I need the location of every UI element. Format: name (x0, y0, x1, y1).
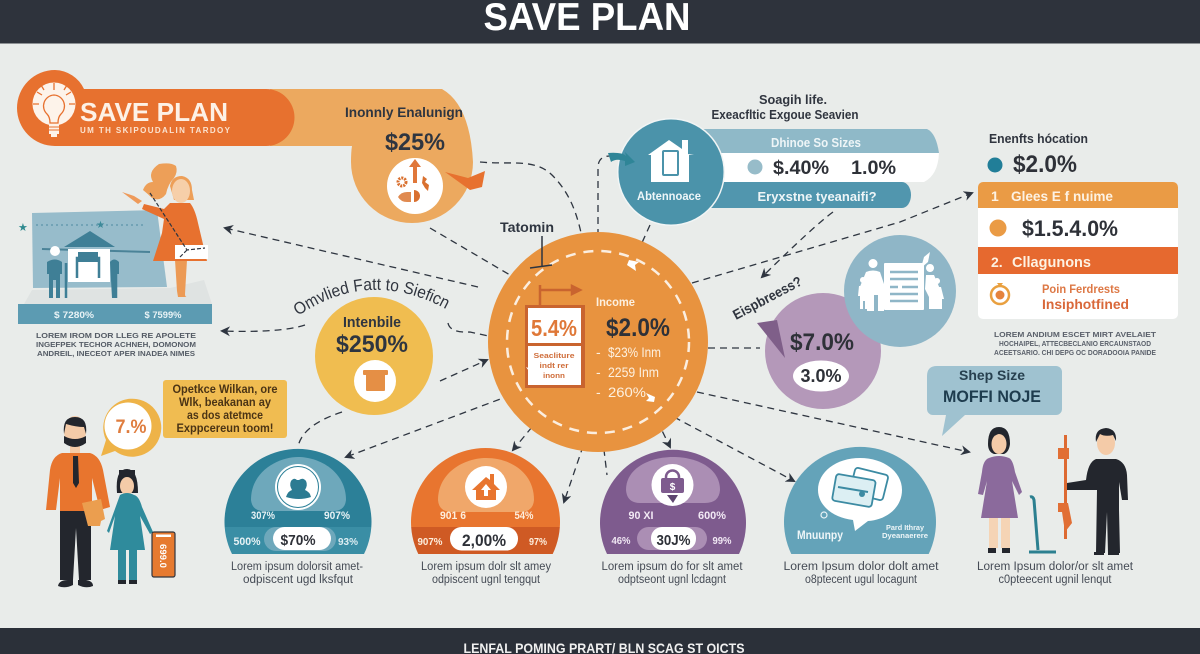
pill value: 2,00% (462, 531, 506, 550)
man figure (1067, 428, 1128, 555)
lighter pill (264, 527, 336, 551)
yellow callout: Wlk, beakanan ay (179, 397, 272, 409)
woman figure (122, 163, 208, 297)
circle label: Abtennoace (637, 191, 701, 203)
row one dot (990, 220, 1006, 236)
band heading: Dhinoe So Sizes (771, 136, 861, 150)
dome (224, 448, 372, 554)
phone (152, 532, 175, 577)
yellow callout (163, 380, 287, 438)
caption: Lorem Ipsum dolor dolt amet (784, 561, 939, 573)
vacuum stick (1029, 497, 1056, 552)
row two label: Cllagunons (1012, 254, 1091, 271)
value: $250% (336, 331, 408, 358)
value right: 1.0% (851, 158, 896, 179)
band text: Eryxstne tyeanaifi? (758, 189, 877, 204)
value left: $.40% (773, 158, 829, 179)
yellow callout: Exppcereun toom! (176, 423, 274, 435)
percent bubble: 7.% (116, 417, 147, 438)
arrow: centre to purple circle (708, 347, 760, 349)
teal pointer (608, 152, 635, 166)
house diagram (42, 231, 150, 298)
yellow callout: as dos atetmce (187, 410, 263, 422)
woman figure (978, 427, 1022, 553)
caption (231, 561, 363, 586)
speech bubble (818, 458, 902, 531)
callout label: Tatomin (500, 219, 554, 235)
panel: couple (977, 427, 1134, 586)
bubble heading: Shep Size (959, 367, 1025, 383)
inner dome (626, 457, 720, 503)
circle fill (618, 120, 724, 224)
income list: $23% Inm (608, 344, 661, 360)
metric top left: 307% (251, 510, 275, 522)
arrow: house to centre (636, 225, 650, 256)
dome (600, 450, 746, 554)
panel: woman at board (18, 163, 212, 358)
phone: 699.0 (158, 544, 168, 568)
metric bottom right: 97% (529, 536, 548, 548)
dome (784, 447, 936, 554)
inner dome (438, 458, 534, 512)
pointer arrow (445, 171, 485, 190)
curved label: Omvlied Fatt to Sieficn (294, 278, 448, 314)
dome side text: Dyeanaerere (882, 531, 928, 540)
metric top left: 901 6 (440, 510, 466, 522)
income list: - (596, 364, 601, 380)
arrow: centre to card dome (674, 417, 794, 481)
income list (596, 344, 661, 400)
arrow: yellow circle to teal dome (298, 412, 342, 447)
caption (977, 561, 1134, 586)
orange pole (1058, 435, 1072, 539)
arrow: centre to orange dome right (564, 423, 591, 502)
upper sign panel (528, 308, 581, 343)
blue circle (844, 235, 956, 347)
caption (784, 561, 939, 586)
income list: 260% (608, 384, 646, 400)
orange banner (17, 70, 294, 146)
header bar (0, 0, 1200, 44)
icon: lock: $ (670, 482, 676, 493)
icon: people (275, 464, 321, 510)
icon: house (465, 466, 507, 508)
icon: lock (652, 464, 694, 506)
sign text (534, 351, 574, 380)
bubble value: $25% (385, 129, 445, 156)
arrow: centre to orange dome (513, 427, 532, 450)
income value: $2.0% (606, 314, 670, 342)
caption: Lorem ipsum dolorsit amet- (231, 561, 363, 573)
inner dome (251, 457, 346, 511)
arrow: curved savings pointer to centre (480, 162, 586, 258)
lower pill band (700, 182, 911, 208)
white card (978, 182, 1178, 319)
heading: Enenfts hócation (989, 131, 1088, 146)
arrow: savings bubble to centre (430, 228, 510, 275)
panel: central income circle (488, 219, 708, 452)
arrow: label to centre (448, 323, 493, 337)
caption: INGEFPEK TECHOR ACHNEH, DOMONOM (36, 340, 196, 349)
dotted line (36, 224, 146, 226)
subtitle line one: Soagih life. (759, 92, 827, 107)
man figure (46, 416, 110, 587)
icon: light bulb (32, 82, 76, 137)
caption: c0pteecent ugnil lenqut (998, 574, 1112, 586)
panel: teal dome (224, 448, 372, 586)
metric bottom right: 93% (338, 536, 359, 548)
value band (18, 304, 212, 324)
row one value: $1.5.4.0% (1022, 216, 1118, 241)
pill value: $70% (280, 532, 316, 549)
metric bottom left: 500% (234, 536, 261, 548)
speech bubble: shop size (927, 366, 1062, 436)
lighter pill (637, 527, 707, 550)
light orange bar and bubble (270, 89, 473, 223)
metric top right: 54% (514, 510, 534, 522)
star marker: ★ (96, 220, 105, 231)
exclamation pointer (757, 320, 785, 358)
small ring (821, 512, 827, 518)
banner subtitle: UM TH SKIPOUDALIN TARDOY (80, 126, 231, 135)
metric bottom left: 46% (612, 535, 631, 547)
arrow: centre to purple dome (652, 410, 670, 447)
caption (421, 561, 551, 586)
percent bubble (101, 399, 161, 457)
metric bottom right: 99% (712, 535, 732, 547)
lower sign panel (528, 346, 581, 385)
metric bottom left: 907% (418, 536, 443, 548)
panel: housing pill (608, 92, 939, 226)
circle (488, 232, 708, 452)
white pill (273, 527, 331, 550)
arrow: centre down (601, 425, 607, 475)
arrow: overlap to board caption (222, 325, 305, 331)
row two text line one: Poin Ferdrests (1042, 282, 1120, 296)
caption: ANDREIL, INECEOT APER INADEA NIMES (37, 349, 195, 358)
sign text: Seacliture (534, 351, 574, 360)
rotated label: Eispbreess? (730, 273, 805, 323)
sign board (525, 305, 585, 388)
callout stem (530, 236, 552, 268)
icon: box (354, 360, 396, 402)
panel: purple dome (600, 450, 746, 586)
caption: odptseont ugnl lcdagnt (618, 574, 727, 586)
arrow: yellow circle to centre (440, 360, 487, 381)
caption (36, 331, 196, 358)
ring arrowhead left (526, 367, 535, 376)
arrow: branch to question (762, 212, 833, 277)
arrow: centre to couple (697, 392, 969, 452)
bubble label: Inonnly Enalunign (345, 104, 463, 120)
panel: yellow circle (294, 278, 448, 415)
dome side text: Pard Ithray (886, 523, 925, 532)
band value right: $ 7599% (144, 310, 182, 321)
sub value: 3.0% (800, 366, 842, 386)
row one header (978, 182, 1178, 208)
circle (315, 297, 433, 415)
icon: stopwatch (991, 283, 1009, 304)
caption: Lorem ipsum dolr slt amey (421, 561, 551, 573)
row two number: 2. (991, 254, 1003, 270)
white pill (651, 527, 696, 550)
income label: Income (596, 295, 635, 309)
white ellipse (793, 360, 849, 392)
sign text: indt rer (540, 361, 569, 370)
table caption: LOREM ANDIUM ESCET MIRT AVELAIET (994, 330, 1156, 339)
panel: orange dome (411, 448, 560, 586)
yellow callout: Opetkce Wilkan, ore (172, 384, 278, 396)
white pill (450, 527, 518, 550)
panel: purple and blue circles (730, 235, 956, 409)
footer bar (0, 628, 1200, 654)
circle (617, 118, 725, 226)
sign text: inonn (543, 371, 565, 380)
caption: Lorem Ipsum dolor/or slt amet (977, 561, 1134, 573)
banner title: SAVE PLAN (80, 97, 228, 127)
metric top right: 600% (698, 510, 726, 522)
metric top right: 907% (324, 510, 350, 522)
panel: savings banner (17, 70, 485, 223)
pill value: 30J% (656, 532, 690, 549)
caption: odpiscent ugnl tengqut (432, 574, 541, 586)
row one number: 1 (991, 188, 999, 204)
arrow: centre to right panel (692, 193, 972, 283)
caption: o8ptecent ugul locagunt (805, 574, 918, 586)
child figure (107, 469, 153, 584)
caption: Lorem ipsum do for slt amet (602, 561, 743, 573)
sign arrow (540, 285, 580, 306)
dome (411, 448, 560, 554)
caption: LOREM IROM DOR LLEG RE APOLETE (36, 331, 196, 340)
purple circle (765, 293, 881, 409)
row one label: Glees E f nuime (1011, 188, 1113, 204)
table caption: ACEETSARIO. CHI DEPG OC DORADOOIA PANIDE (994, 348, 1156, 357)
panel: card dome (784, 447, 939, 586)
icon: house (648, 140, 694, 182)
row two header (978, 247, 1178, 274)
top pill band (700, 129, 939, 153)
table caption (994, 330, 1156, 357)
board (32, 210, 167, 288)
value: $7.0% (790, 329, 854, 356)
icon: growth gears (387, 158, 443, 214)
income list: - (596, 384, 601, 400)
ring arrowhead right (646, 393, 655, 402)
ring arrowhead top (627, 260, 639, 271)
bubble text: MOFFI NOJE (943, 387, 1041, 406)
panel: man and child (46, 380, 287, 587)
icon: family and document (858, 252, 944, 311)
dome side text (882, 523, 928, 540)
dot (748, 160, 762, 174)
label: Intenbile (343, 314, 401, 331)
dome label: Mnuunpy (797, 530, 844, 542)
arrow: centre to teal dome (346, 395, 511, 457)
arrows: dashed connectors (222, 156, 972, 502)
dashed ring (507, 251, 689, 433)
arrow: centre up to house (598, 156, 610, 236)
icon: cards (832, 467, 889, 507)
table caption: HOCHAIPEL, ATTECBECLANIO ERCAUNSTAOD (999, 339, 1152, 348)
sign value: 5.4% (531, 315, 577, 341)
income list: 2259 Inm (608, 364, 659, 380)
value: $2.0% (1013, 151, 1077, 178)
panel: right table (978, 131, 1178, 357)
platform (24, 280, 212, 304)
caption: odpiscent ugd lksfqut (243, 574, 354, 586)
dot (988, 158, 1002, 172)
band value left: $ 7280% (54, 310, 95, 321)
caption (602, 561, 743, 586)
star markers: ★ (18, 222, 28, 234)
metric top left: 90 XI (628, 510, 654, 522)
white pill band (700, 153, 939, 182)
income list: - (596, 344, 601, 360)
subtitle line two: Exeacfltic Exgoue Seavien (712, 107, 859, 122)
arrow: centre to woman (225, 228, 478, 287)
row two text line two: Insiphotfined (1042, 296, 1129, 312)
